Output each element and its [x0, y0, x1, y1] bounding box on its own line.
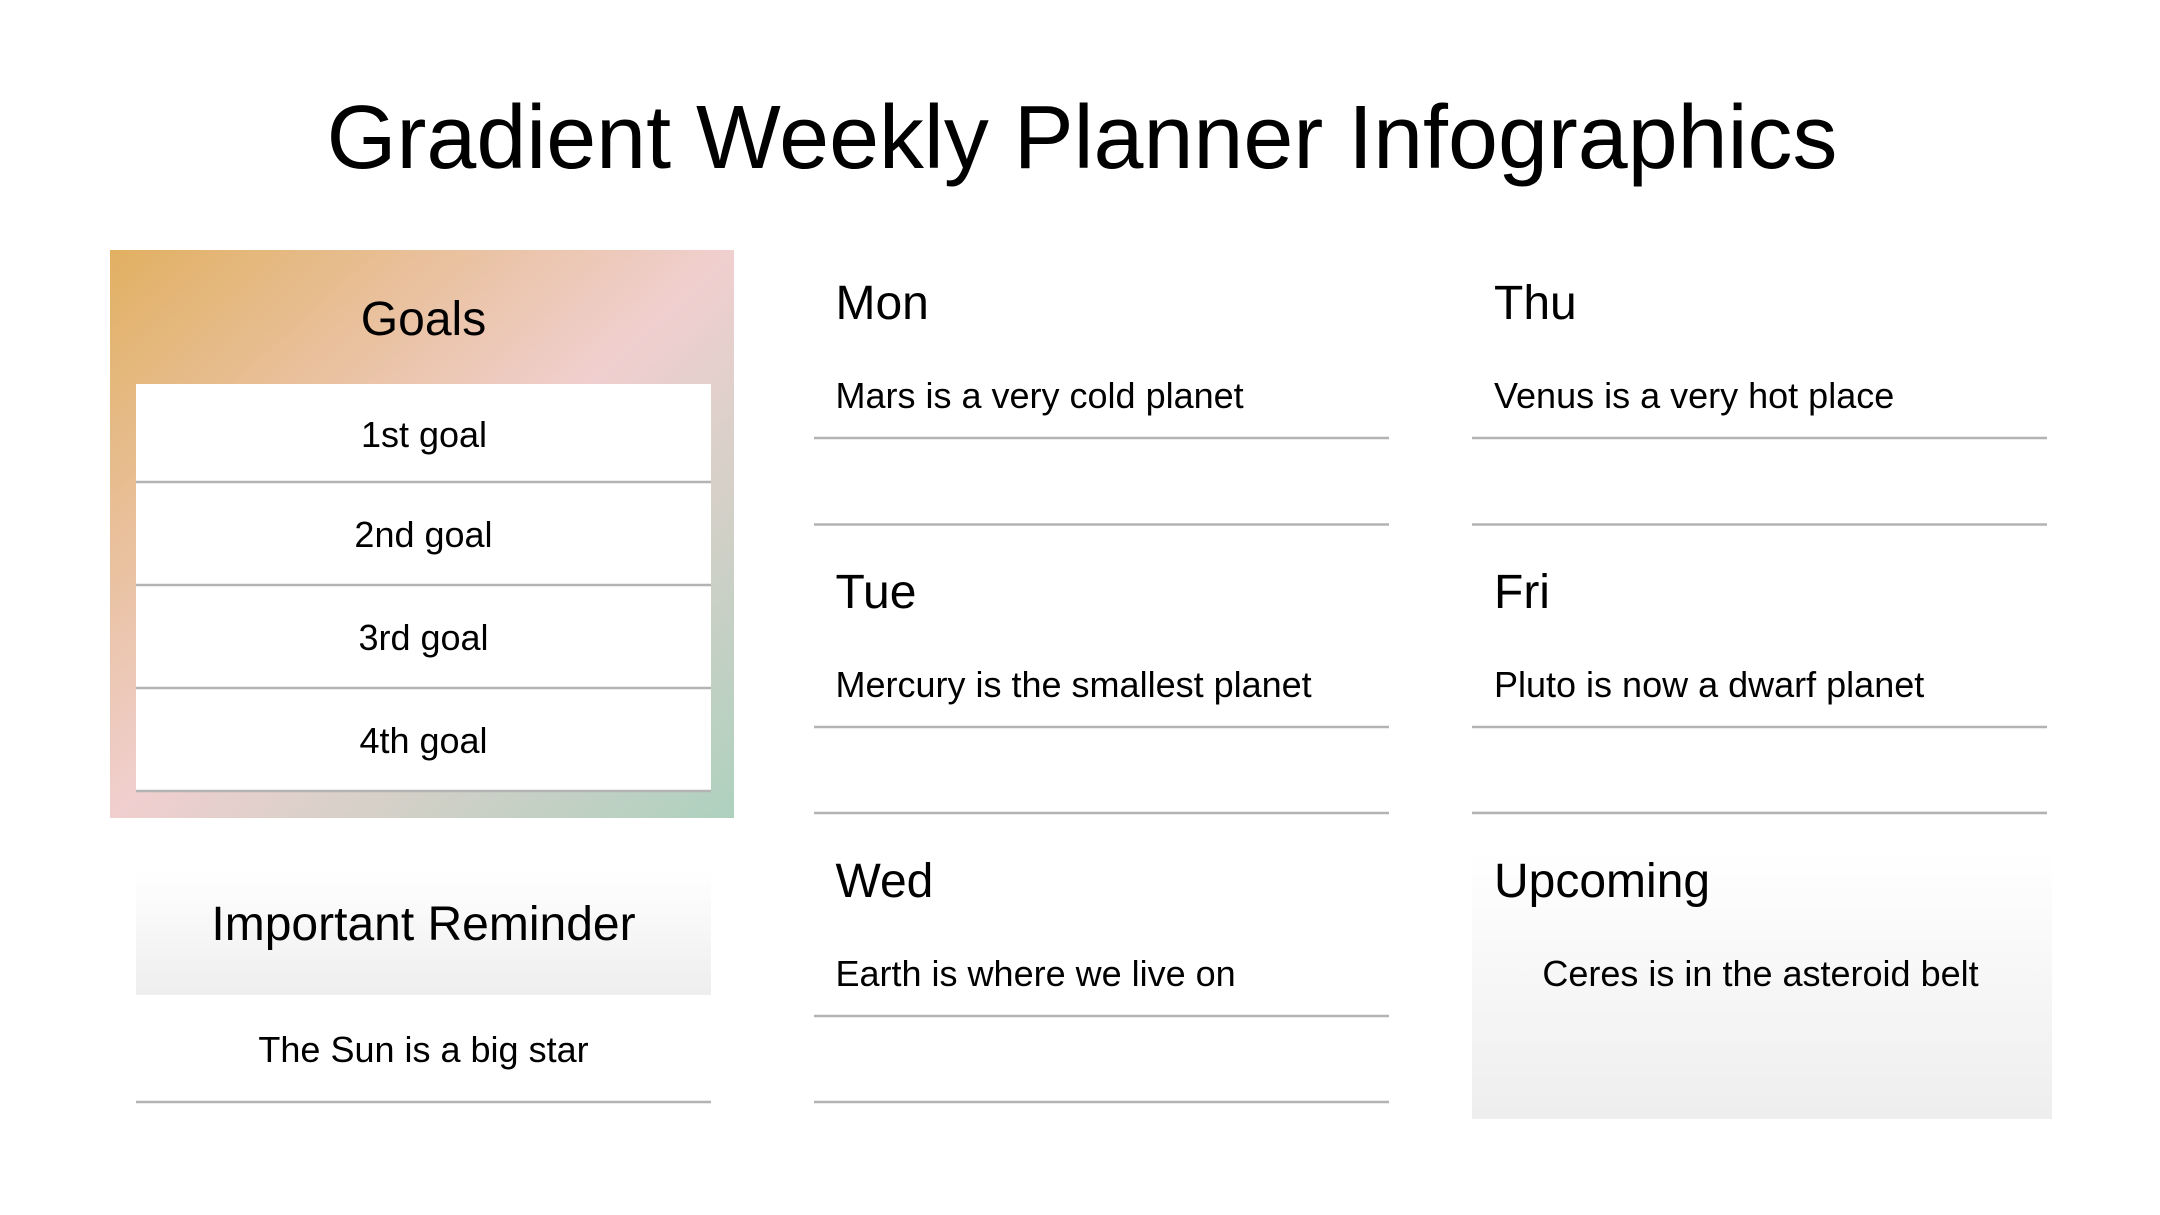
goal 2: 2nd goal	[354, 514, 493, 555]
panel: thursday: Venus is a very hot place	[1494, 375, 1894, 416]
goals heading: Goals	[361, 293, 486, 346]
panel: monday	[814, 277, 1389, 524]
panel: friday: Pluto is now a dwarf planet	[1494, 664, 1924, 705]
panel: tuesday: Mercury is the smallest planet	[836, 664, 1312, 705]
panel: wednesday	[814, 855, 1389, 1102]
panel: thursday: Thu	[1494, 277, 1577, 330]
panel: monday: Mon	[836, 277, 929, 330]
goal 4: 4th goal	[359, 720, 488, 761]
panel: upcoming	[1472, 813, 2052, 1119]
reminder heading: Important Reminder	[211, 898, 636, 951]
goal 3: 3rd goal	[358, 617, 489, 658]
reminder text: The Sun is a big star	[258, 1029, 589, 1070]
panel: monday: Mars is a very cold planet	[836, 375, 1244, 416]
panel: friday: Fri	[1494, 566, 1550, 619]
panel: friday	[1472, 566, 2047, 813]
title: Gradient Weekly Planner Infographics	[327, 88, 1837, 188]
panel: wednesday: Wed	[836, 855, 933, 908]
goals gradient background	[110, 250, 734, 818]
panel: goals	[110, 250, 734, 818]
panel: important reminder	[136, 854, 711, 1102]
panel: thursday	[1472, 277, 2047, 524]
reminder heading	[136, 854, 711, 995]
panel: tuesday	[814, 566, 1389, 813]
panel: upcoming: Ceres is in the asteroid belt	[1542, 953, 1979, 994]
panel: upcoming: Upcoming	[1494, 855, 1710, 908]
panel: tuesday: Tue	[836, 566, 916, 619]
panel: wednesday: Earth is where we live on	[836, 953, 1236, 994]
goal 1: 1st goal	[361, 414, 487, 455]
goals list	[136, 384, 711, 791]
